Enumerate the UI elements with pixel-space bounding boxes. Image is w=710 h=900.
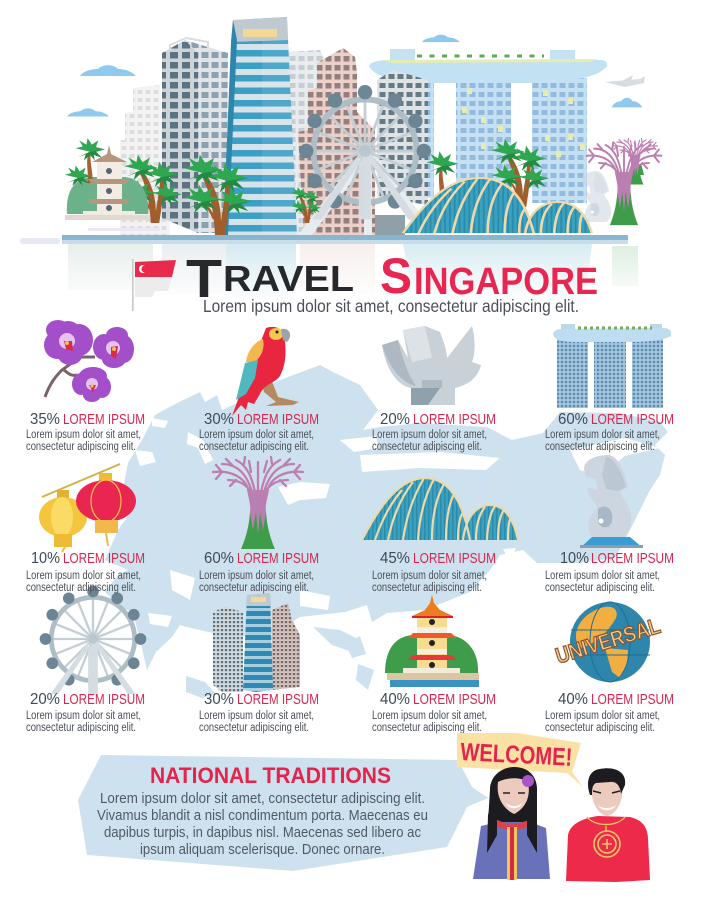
waterline [20,235,628,244]
merlion statue [582,171,611,222]
palm trees right [426,139,549,207]
stat: museum: Lorem ipsum dolor sit amet, [372,429,487,441]
plaza [375,215,405,235]
icon: merlion [580,455,643,548]
stat: skyscrapers: consectetur adipiscing elit. [199,722,309,734]
stat: orchid: 35% [30,411,60,428]
stat: ferris wheel: Lorem ipsum dolor sit amet, [26,710,141,722]
panel body text: dapibus turpis, in dapibus nisl. Maecenas sed libero ac [104,824,421,841]
stat: museum [372,411,496,453]
icon: pagoda [385,595,479,687]
stat: domes: LOREM IPSUM [413,551,496,567]
stat: supertree: LOREM IPSUM [237,551,319,567]
airplane [605,75,645,87]
stat: universal: LOREM IPSUM [591,692,674,708]
stat: museum: consectetur adipiscing elit. [372,441,482,453]
pink brick tower [298,48,375,236]
stat: parrot: LOREM IPSUM [237,412,319,428]
stat: supertree [199,550,319,594]
stat: lanterns: Lorem ipsum dolor sit amet, [26,570,141,582]
word: Singapore: S [380,248,412,304]
panel body text: ipsum aliquam scelerisque. Donec ornare. [140,841,385,858]
stat: ferris wheel [26,691,145,734]
icon: domes [362,478,518,540]
stat: pagoda: Lorem ipsum dolor sit amet, [372,710,487,722]
stat: merlion: consectetur adipiscing elit. [545,582,655,594]
stat: hotel [545,411,674,453]
gardens by the bay domes [403,178,592,233]
icon: marina bay sands [553,324,671,408]
chest emblem [594,831,620,857]
tall blue striped tower [223,17,297,236]
row 2 labels [26,550,674,594]
stat: lanterns [26,550,145,594]
stat: hotel: 60% [558,411,588,428]
hero skyline illustration [20,17,661,302]
icon: supertree [213,457,303,549]
stat: parrot [199,411,319,453]
map of Singapore background [105,365,668,698]
singapore flag [132,259,176,311]
stat: lanterns: 10% [31,550,60,567]
grey tower right of wheel [377,70,428,205]
icon: orchids [44,320,134,402]
map rivers and inlets [135,418,660,627]
title [132,248,598,311]
stat: ferris wheel: consectetur adipiscing elit. [26,722,136,734]
clouds [67,35,642,116]
stat: domes: consectetur adipiscing elit. [372,582,482,594]
word: Travel: T [186,249,222,309]
stat: merlion: 10% [560,550,589,567]
subtitle: Lorem ipsum dolor sit amet, consectetur adipiscing elit. [203,296,579,316]
grey office tower [162,38,228,233]
word: Travel [186,249,354,309]
man in traditional dress [566,768,650,882]
stat: lanterns: consectetur adipiscing elit. [26,582,136,594]
stat: universal: Lorem ipsum dolor sit amet, [545,710,660,722]
stat: skyscrapers [199,691,319,734]
stat: skyscrapers: LOREM IPSUM [237,692,319,708]
supertrees [587,138,661,225]
stat: supertree: consectetur adipiscing elit. [199,582,309,594]
panel heading: NATIONAL TRADITIONS [150,763,391,788]
stat: pagoda [372,691,496,734]
palm trees left [124,155,321,235]
stat: skyscrapers: Lorem ipsum dolor sit amet, [199,710,314,722]
word: Travel: RAVEL [223,258,354,299]
stat: orchid [26,411,145,453]
stat: orchid: consectetur adipiscing elit. [26,441,136,453]
panel: national traditions [78,755,488,871]
stat: parrot: 30% [204,411,234,428]
stat: ferris wheel: 20% [30,691,60,708]
icon: artscience museum [382,326,481,405]
icon: lanterns [39,464,136,552]
row 1 labels [26,411,674,453]
row 3 labels [26,691,674,734]
welcome speech bubble [457,733,583,787]
stat: hotel: LOREM IPSUM [591,412,674,428]
stat: parrot: Lorem ipsum dolor sit amet, [199,429,314,441]
stat: pagoda: 40% [380,691,410,708]
panel body text: Lorem ipsum dolor sit amet, consectetur adipiscing elit. [100,790,425,807]
panel body text [97,790,428,858]
hero reflection [60,244,650,302]
pale tower behind wheel [288,50,330,235]
stat: universal [545,691,674,734]
stat: museum: LOREM IPSUM [413,412,496,428]
word: Singapore: INGAPORE [414,261,598,303]
stat: merlion [545,550,674,594]
stat: hotel: consectetur adipiscing elit. [545,441,655,453]
woman in traditional dress [473,767,550,880]
panel body text: Vivamus blandit a nisl condimentum porta. Maecenas eu [97,807,428,824]
ferris wheel [298,85,437,235]
stat: pagoda: consectetur adipiscing elit. [372,722,482,734]
stat: orchid: Lorem ipsum dolor sit amet, [26,429,141,441]
stat: museum: 20% [380,411,410,428]
stat: universal: consectetur adipiscing elit. [545,722,655,734]
stat: universal: 40% [558,691,588,708]
stat: orchid: LOREM IPSUM [63,412,145,428]
stat: parrot: consectetur adipiscing elit. [199,441,309,453]
stat: lanterns: LOREM IPSUM [63,551,145,567]
pale background tower [120,85,170,235]
stat: supertree: 60% [204,550,234,567]
pagoda on hill [65,138,160,231]
stat: merlion: Lorem ipsum dolor sit amet, [545,570,660,582]
stat: merlion: LOREM IPSUM [591,551,674,567]
stat: domes: Lorem ipsum dolor sit amet, [372,570,487,582]
stat: pagoda: LOREM IPSUM [413,692,496,708]
icon: branch and parrot [232,327,299,416]
word: Singapore [380,248,598,304]
icon: universal globe [553,602,663,682]
flower hair pin [522,775,534,787]
icon: ferris wheel [40,586,146,694]
stat: skyscrapers: 30% [204,691,234,708]
stat: hotel: Lorem ipsum dolor sit amet, [545,429,660,441]
stat: domes: 45% [380,550,410,567]
icon: skyscrapers [213,593,300,692]
marina bay sands hotel [369,49,607,203]
stat: domes [372,550,496,594]
universal banner: UNIVERSAL [553,613,663,669]
welcome text: WELCOME! [460,738,573,772]
stat: supertree: Lorem ipsum dolor sit amet, [199,570,314,582]
stat: ferris wheel: LOREM IPSUM [63,692,145,708]
